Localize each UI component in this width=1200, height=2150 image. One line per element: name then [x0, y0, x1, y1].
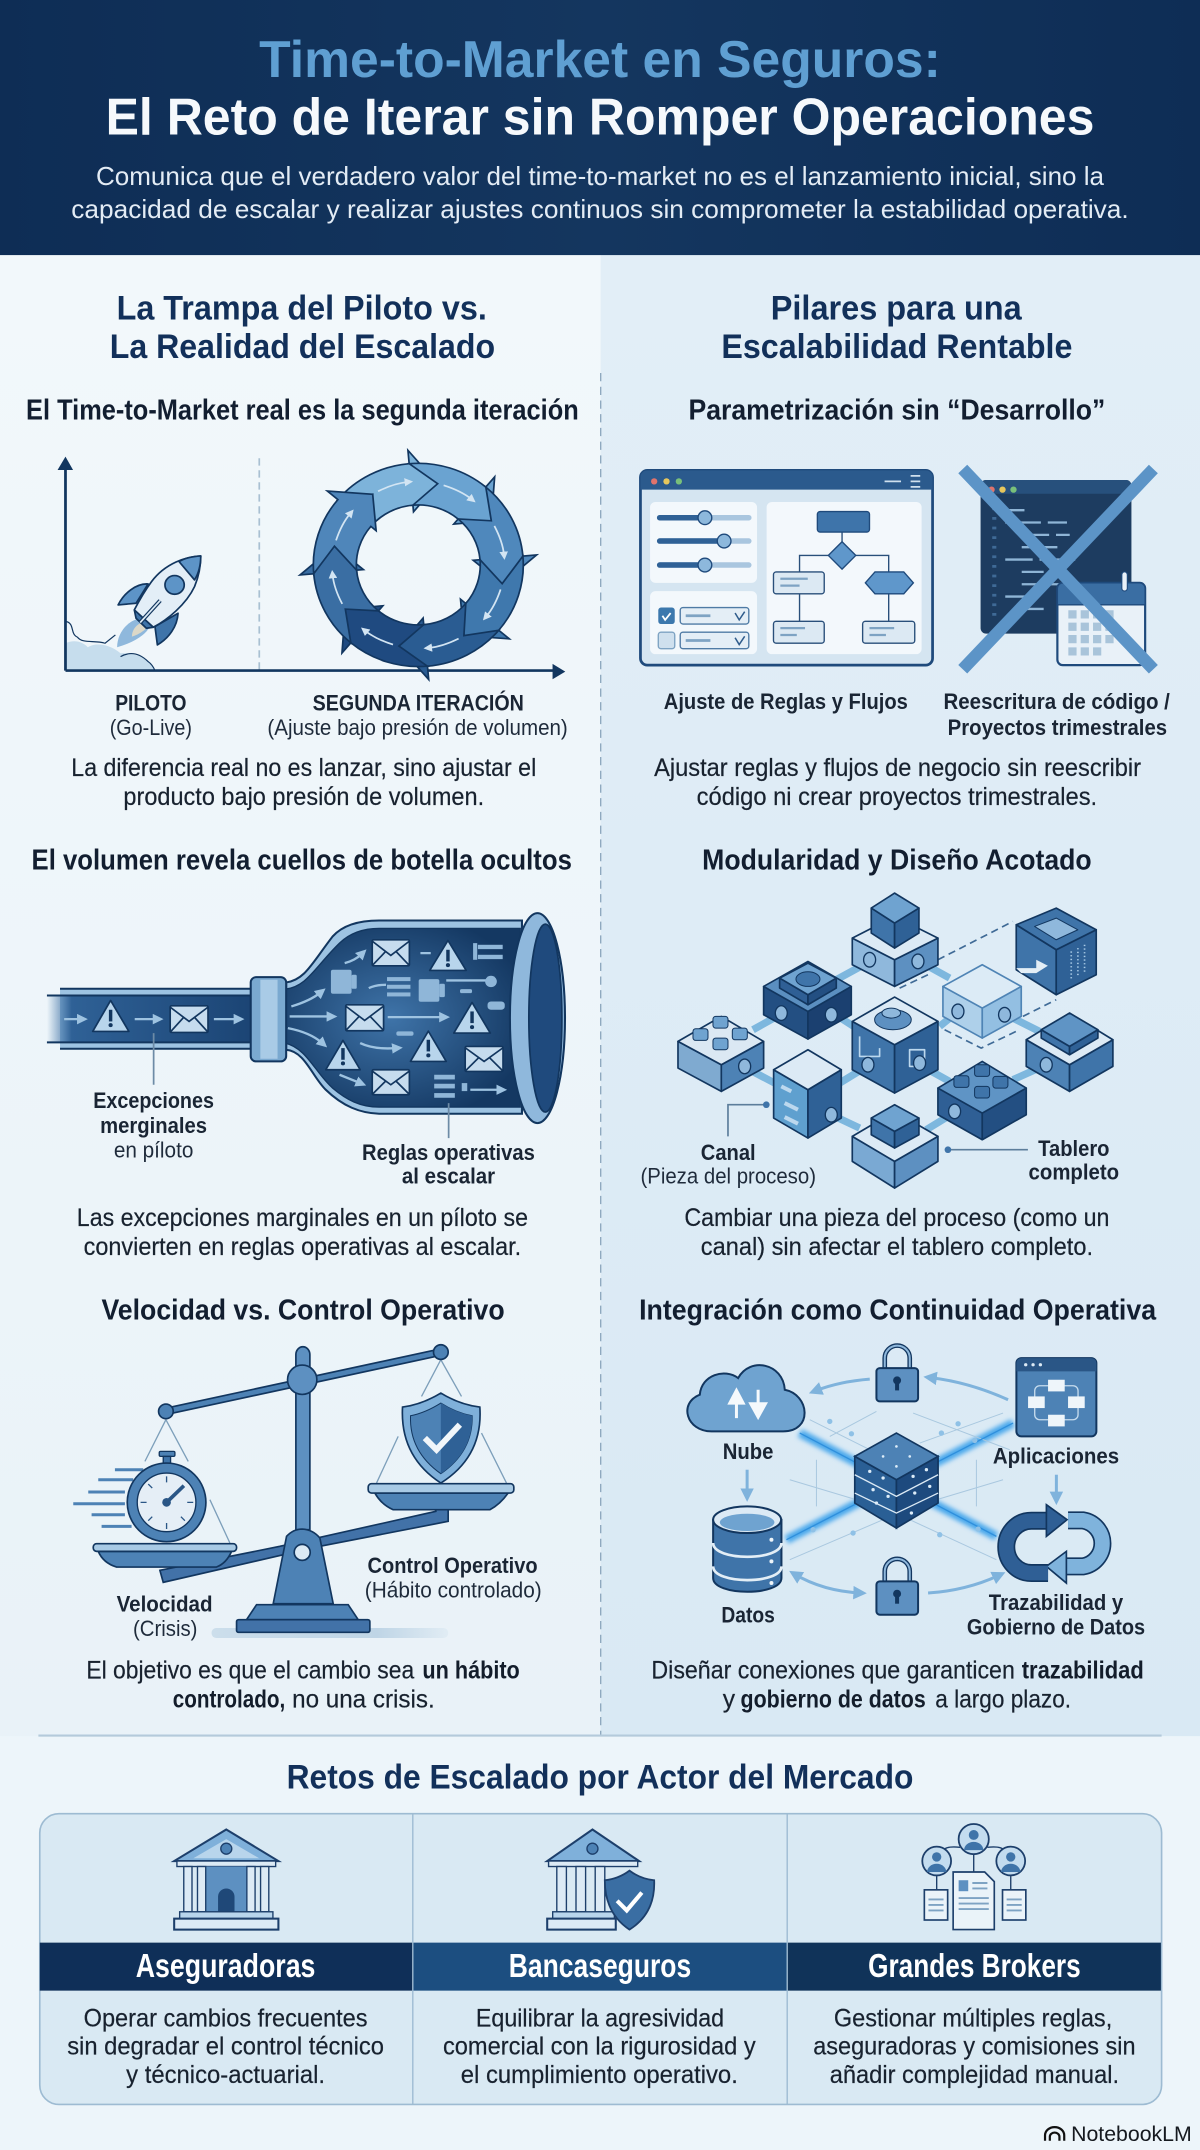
icon: stopwatch: [73, 1451, 206, 1542]
dashed links: [900, 921, 1056, 1016]
label: nube: Nube: [723, 1439, 773, 1464]
label: datos: Datos: [721, 1602, 775, 1627]
icon: rocket: [117, 556, 201, 647]
pedestal: [273, 1529, 333, 1604]
text: objective: un hábito: [422, 1657, 520, 1685]
label: reescritura: [944, 689, 1170, 740]
text: adjust rules: [654, 754, 1142, 811]
icon: shield with check: [402, 1393, 480, 1483]
label: trazabilidad: [967, 1590, 1145, 1640]
heading: market actors: Retos de Escalado por Actor del Mercado: [287, 1758, 913, 1796]
header banner: [0, 0, 1200, 255]
block: right: [1026, 1013, 1113, 1091]
label: ajuste de reglas: Ajuste de Reglas y Flujos: [664, 689, 908, 714]
title line 1: Time-to-Market en Seguros:: [259, 31, 941, 89]
text: change a piece: [684, 1204, 1109, 1261]
envelopes: [170, 940, 503, 1095]
cross: [963, 469, 1153, 669]
illustration: modular blocks board: [678, 893, 1113, 1188]
label: excepciones: merginales: [100, 1113, 207, 1138]
connectors: [743, 960, 1046, 1130]
label: trazabilidad: Gobierno de Datos: [967, 1615, 1145, 1640]
text: bancaseguros: [443, 2004, 756, 2089]
text: design connections: gobierno de datos: [741, 1685, 926, 1713]
heading: left column: La Realidad del Escalado: [110, 328, 495, 366]
label: control operativo: [365, 1553, 542, 1603]
heading: right column: Pilares para una: [771, 290, 1023, 328]
block: channel piece: [774, 1050, 841, 1138]
illustration: rules and flows window: [640, 470, 933, 665]
subheading: bottlenecks: El volumen revela cuellos de botella ocultos: [32, 844, 572, 876]
leader lines: [154, 1033, 449, 1138]
sliders card: [650, 502, 757, 583]
background: bottom section: [0, 1736, 1200, 2150]
text: bancaseguros: el cumplimiento operativo.: [461, 2061, 738, 2089]
labels: piloto: (Go-Live): [110, 715, 192, 740]
small documents: [331, 943, 505, 1098]
text: difference: La diferencia real no es lanzar, sino ajustar el: [71, 754, 536, 782]
subheading: second iteration: El Time-to-Market real es la segunda iteración: [26, 395, 579, 427]
text: objective: no una crisis.: [292, 1685, 435, 1713]
text: change a piece: canal) sin afectar el tablero completo.: [701, 1233, 1093, 1261]
text: objective: [86, 1657, 520, 1713]
icon: central cube: [855, 1433, 938, 1528]
illustration: bottleneck funnel: [47, 913, 565, 1138]
subheading: integration: Integración como Continuidad Operativa: [639, 1294, 1157, 1326]
band: aseguradoras: Aseguradoras: [136, 1947, 315, 1984]
heading: right column: [721, 290, 1072, 366]
leader lines: [728, 1105, 1028, 1150]
illustration: balance scale: [73, 1345, 514, 1638]
text: objective: controlado,: [173, 1685, 285, 1713]
label: reglas operativas: Reglas operativas: [362, 1140, 535, 1165]
icon: bottom padlock: [876, 1559, 918, 1615]
icon: top padlock: [876, 1346, 918, 1401]
subtitle: capacidad de escalar y realizar ajustes continuos sin comprometer la estabilidad operativa.: [71, 194, 1129, 224]
subheading: parametrization: Parametrización sin “Desarrollo”: [688, 395, 1105, 427]
block: dark lego: [938, 1061, 1026, 1140]
strings: [145, 1360, 506, 1543]
label: tablero: completo: [1029, 1159, 1119, 1184]
text: grandes brokers: [813, 2004, 1136, 2089]
text: exceptions: convierten en reglas operativas al escalar.: [84, 1233, 521, 1261]
icon: bank: [174, 1829, 278, 1930]
label: velocidad: [117, 1591, 213, 1641]
text: design connections: trazabilidad: [1022, 1657, 1144, 1685]
block: top: [852, 893, 938, 986]
text: adjust rules: código ni crear proyectos trimestrales.: [697, 783, 1097, 811]
text: difference: producto bajo presión de volumen.: [123, 783, 484, 811]
label: excepciones: en píloto: [114, 1137, 193, 1162]
block: detached: [1016, 908, 1096, 995]
labels: segunda iteracion: (Ajuste bajo presión de volumen): [267, 715, 568, 740]
text: aseguradoras: y técnico-actuarial.: [126, 2061, 325, 2089]
label: reglas operativas: al escalar: [402, 1164, 495, 1189]
text: exceptions: Las excepciones marginales en un píloto se: [77, 1204, 528, 1232]
text: adjust rules: Ajustar reglas y flujos de negocio sin reescribir: [654, 754, 1142, 782]
subheading: speed vs control: Velocidad vs. Control Operativo: [101, 1294, 505, 1326]
block: upper left dark: [764, 961, 851, 1039]
block: pale removable: [943, 965, 1021, 1048]
code window: [981, 480, 1131, 634]
subheading: modularity: Modularidad y Diseño Acotado: [702, 844, 1092, 876]
label: canal: Canal: [701, 1140, 756, 1165]
subtitle: [71, 161, 1129, 224]
block: center: [852, 997, 938, 1093]
text: grandes brokers: añadir complejidad manual.: [830, 2061, 1119, 2089]
label: reescritura: Proyectos trimestrales: [948, 715, 1167, 740]
block: bottom: [852, 1105, 938, 1188]
rim: [510, 913, 565, 1123]
label: control operativo: Control Operativo: [368, 1553, 538, 1578]
text: exceptions: [77, 1204, 528, 1261]
icon: loop arrows: [1006, 1505, 1102, 1583]
text: grandes brokers: Gestionar múltiples reglas,: [834, 2004, 1112, 2032]
label: canal: (Pieza del proceso): [640, 1164, 816, 1189]
subtitle: Comunica que el verdadero valor del time-to-market no es el lanzamiento inicial, sino la: [96, 161, 1105, 191]
text: design connections: [651, 1657, 1144, 1713]
text: bancaseguros: Equilibrar la agresividad: [476, 2004, 724, 2032]
upper beam: [166, 1352, 441, 1411]
connector ports: [739, 952, 1052, 1122]
icon: circular iteration arrows: [278, 429, 559, 701]
label: velocidad: Velocidad: [117, 1591, 213, 1616]
text: aseguradoras: [67, 2004, 384, 2089]
table: market actors: [40, 1814, 1162, 2104]
label: canal: [640, 1140, 816, 1189]
text: grandes brokers: aseguradoras y comisiones sin: [813, 2032, 1136, 2060]
label: velocidad: (Crisis): [133, 1616, 197, 1641]
icon: brokers network: [922, 1824, 1026, 1930]
text: bancaseguros: comercial con la rigurosidad y: [443, 2032, 756, 2060]
bottle body: [286, 920, 522, 1114]
title line 2: El Reto de Iterar sin Romper Operaciones: [106, 88, 1094, 146]
warning triangles: [93, 940, 490, 1070]
labels: piloto: PILOTO: [115, 690, 187, 715]
icon: database: [713, 1506, 781, 1592]
label: excepciones: [93, 1088, 214, 1162]
band: grandes brokers: [788, 1943, 1161, 1991]
heading: right column: Escalabilidad Rentable: [721, 328, 1072, 366]
flange: [251, 977, 286, 1061]
label: reglas operativas: [362, 1140, 535, 1189]
band: aseguradoras: [40, 1943, 412, 1991]
label: reescritura: Reescritura de código /: [944, 689, 1170, 714]
base: [247, 1605, 358, 1620]
lower arm: [160, 1509, 448, 1582]
labels: piloto: [110, 690, 192, 740]
base shadow: [212, 1628, 448, 1638]
icon: cloud: [687, 1365, 805, 1431]
arrows: [747, 1378, 1056, 1593]
pipe: [47, 989, 253, 1049]
text: objective: El objetivo es que el cambio sea: [86, 1657, 415, 1685]
right pan: [368, 1484, 514, 1510]
calendar: [1057, 572, 1145, 665]
label: aplicaciones: Aplicaciones: [993, 1443, 1119, 1468]
illustration: integration hub: [687, 1346, 1102, 1615]
post: [296, 1347, 310, 1530]
left pan: [93, 1544, 237, 1567]
icon: applications window: [1016, 1358, 1096, 1436]
text: aseguradoras: Operar cambios frecuentes: [84, 2004, 368, 2032]
light streaks: [786, 1423, 1013, 1540]
labels: segunda iteracion: [267, 690, 568, 740]
icon: notebook logo: [1045, 2127, 1064, 2141]
icon: bank with shield: [547, 1829, 654, 1930]
axes: [65, 468, 554, 671]
checkbox card: [650, 591, 757, 654]
text: design connections: a largo plazo.: [935, 1685, 1071, 1713]
text: change a piece: Cambiar una pieza del proceso (como un: [684, 1204, 1109, 1232]
label: trazabilidad: Trazabilidad y: [989, 1590, 1124, 1615]
background: right panel: [601, 255, 1200, 1736]
text: design connections: Diseñar conexiones que garanticen: [651, 1657, 1015, 1685]
label: control operativo: (Hábito controlado): [365, 1578, 542, 1603]
block: left lego: [678, 1016, 764, 1091]
arrows: [64, 953, 501, 1090]
band: bancaseguros: Bancaseguros: [509, 1947, 691, 1984]
illustration: crossed-out code window with calendar: [963, 469, 1153, 669]
labels: segunda iteracion: SEGUNDA ITERACIÓN: [313, 690, 524, 715]
background: left panel: [0, 255, 601, 1736]
text: aseguradoras: sin degradar el control técnico: [67, 2032, 384, 2060]
label: tablero: [1029, 1136, 1119, 1184]
smoke cloud: [65, 622, 155, 671]
watermark: NotebookLM: NotebookLM: [1071, 2122, 1192, 2146]
flowchart card: [767, 502, 922, 654]
band: bancaseguros: [413, 1943, 787, 1991]
label: tablero: Tablero: [1038, 1136, 1109, 1161]
heading: left column: [110, 290, 495, 366]
chart: pilot vs second iteration: [58, 429, 565, 701]
text: design connections: y: [723, 1685, 735, 1713]
text: difference: [71, 754, 536, 811]
band: grandes brokers: Grandes Brokers: [868, 1947, 1081, 1984]
heading: left column: La Trampa del Piloto vs.: [117, 290, 487, 328]
label: excepciones: Excepciones: [93, 1088, 214, 1113]
